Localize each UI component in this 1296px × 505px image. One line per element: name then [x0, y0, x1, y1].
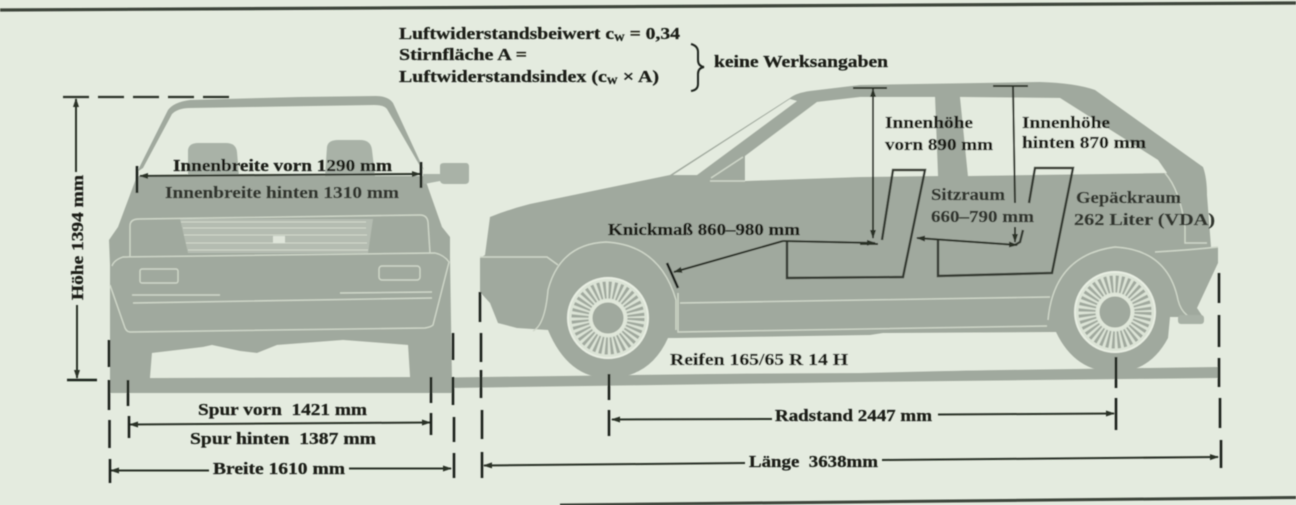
- rear side window: [960, 97, 1167, 176]
- interior width rear: Innenbreite hinten 1310 mm: [165, 183, 399, 202]
- seat space dimension: [917, 185, 1034, 245]
- bumper outline: [110, 253, 449, 332]
- rear wheel arch: [1048, 247, 1203, 320]
- door mirror: [423, 163, 469, 184]
- rear track: Spur hinten 1387 mm: [190, 429, 376, 448]
- underbody gap: [651, 333, 1072, 374]
- luggage label: Gepäckraum: [1076, 188, 1181, 207]
- windscreen glass: [673, 99, 797, 175]
- grille: [180, 219, 373, 253]
- no manufacturer data: keine Werksangaben: [714, 52, 888, 71]
- aerodynamic data block: [399, 24, 888, 91]
- length label: Länge 3638mm: [749, 452, 878, 471]
- luggage value: 262 Liter (VDA): [1074, 210, 1215, 229]
- brace: [691, 44, 704, 91]
- fold dimension: [608, 220, 875, 288]
- interior width dimension: [137, 156, 421, 202]
- fold label: Knickmaß 860–980 mm: [608, 220, 800, 239]
- front wheel arch: [533, 242, 676, 331]
- seat outline rear: [938, 168, 1073, 276]
- badge: [273, 236, 285, 243]
- windscreen frame: [137, 96, 424, 172]
- seats: [188, 143, 239, 176]
- front headroom value: vorn 890 mm: [885, 135, 993, 154]
- headlight outlines: [130, 215, 430, 257]
- wheelbase dimension: [609, 357, 1116, 436]
- rear wheel: [1075, 272, 1155, 352]
- length dimension: [480, 273, 1221, 478]
- front silhouette: [109, 176, 452, 393]
- height label: Höhe 1394 mm: [68, 175, 87, 300]
- bumper stub: [1178, 315, 1204, 324]
- drag coefficient: = 0,34: [625, 24, 680, 43]
- seat right: [325, 140, 375, 176]
- front wheel: [568, 278, 648, 358]
- underbody gap: [150, 340, 410, 378]
- pillar detail: [710, 157, 745, 181]
- front side window: [745, 97, 938, 181]
- drag coefficient: Luftwiderstandsbeiwert c: [399, 24, 580, 43]
- front headroom dimension: [853, 88, 993, 244]
- width label: Breite 1610 mm: [213, 459, 345, 478]
- interior width front: Innenbreite vorn 1290 mm: [173, 156, 392, 175]
- seat space value: 660–790 mm: [931, 207, 1034, 226]
- front track: Spur vorn 1421 mm: [198, 400, 367, 419]
- rear headroom value: hinten 870 mm: [1022, 133, 1146, 152]
- rear headroom label: Innenhöhe: [1022, 113, 1110, 132]
- drag index: × A): [618, 67, 659, 86]
- front view of car: [109, 96, 469, 393]
- drag index: Luftwiderstandsindex (c: [399, 67, 571, 86]
- rear headroom dimension: [993, 86, 1146, 242]
- seat space label: Sitzraum: [931, 185, 1005, 204]
- track dimension: [128, 377, 431, 448]
- drag coefficient: W: [614, 33, 625, 43]
- ground line: [450, 367, 1218, 388]
- overall width dimension: [109, 333, 454, 483]
- fog lamps: [140, 269, 178, 283]
- frontal area: Stirnfläche A =: [399, 45, 527, 64]
- body lines: [1155, 173, 1218, 252]
- front headroom label: Innenhöhe: [885, 113, 973, 132]
- side view of car: [480, 82, 1218, 378]
- side silhouette: [480, 82, 1218, 378]
- seat outline front: [787, 170, 925, 278]
- tyre label: Reifen 165/65 R 14 H: [670, 350, 848, 369]
- wheelbase label: Radstand 2447 mm: [775, 406, 932, 425]
- luggage label: [1074, 188, 1215, 229]
- drag index: W: [607, 76, 618, 86]
